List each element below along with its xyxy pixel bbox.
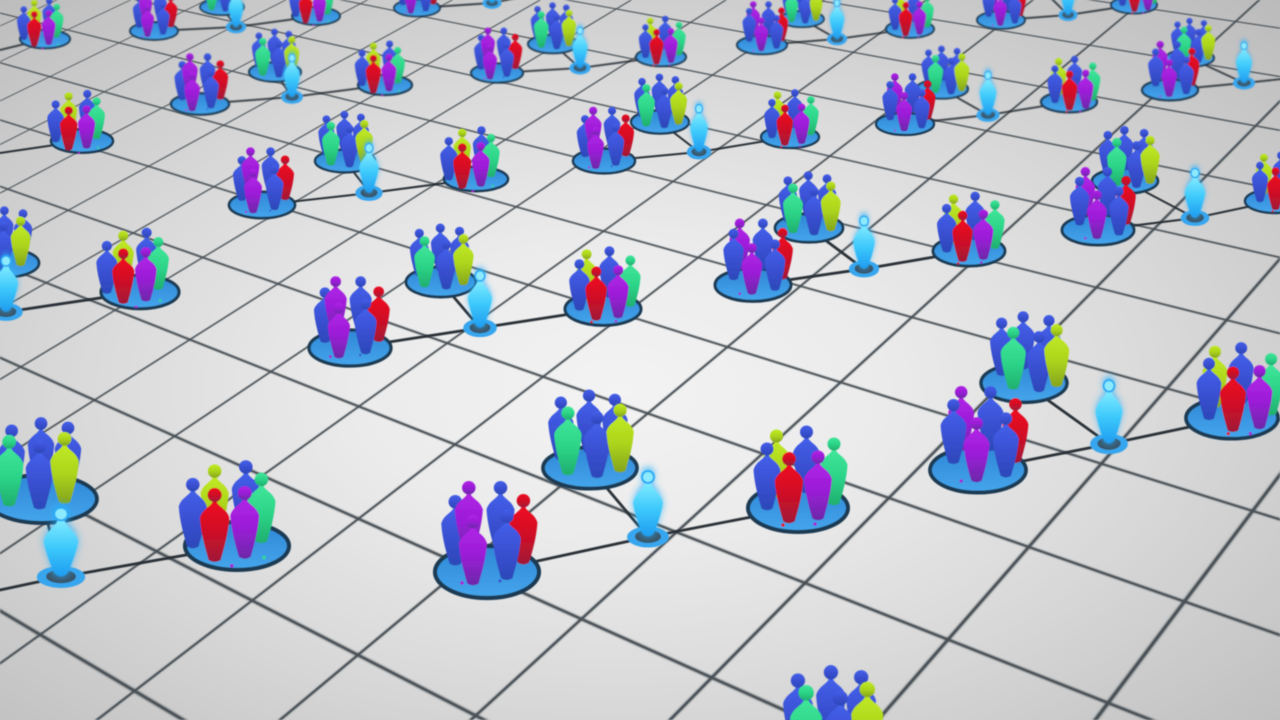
cluster — [47, 90, 113, 154]
cluster — [229, 147, 295, 218]
hub: blue glowing person — [627, 467, 669, 548]
cluster — [780, 0, 824, 27]
cluster — [1166, 18, 1215, 67]
cluster — [528, 2, 578, 53]
cluster — [17, 0, 70, 49]
cluster — [289, 0, 340, 26]
cluster — [775, 171, 843, 242]
cluster — [0, 417, 97, 523]
cluster — [977, 0, 1026, 29]
hub: blue glowing person — [463, 267, 497, 337]
hub: blue glowing person — [483, 0, 501, 9]
hub: blue glowing person — [226, 0, 246, 33]
cluster — [777, 665, 887, 720]
cluster — [249, 29, 301, 82]
cluster — [1062, 167, 1136, 245]
cluster — [886, 0, 934, 38]
hub: blue glowing person — [1090, 376, 1128, 454]
hub: blue glowing person — [281, 51, 303, 104]
cluster — [0, 206, 39, 277]
cluster — [1186, 342, 1280, 439]
hub: blue glowing person — [0, 252, 23, 321]
connection lines: middle hubs — [0, 122, 1275, 230]
cluster — [761, 89, 819, 148]
cluster — [171, 53, 229, 115]
cluster — [315, 111, 375, 172]
cluster — [406, 224, 476, 297]
hub: blue glowing person — [827, 0, 847, 45]
cluster — [573, 107, 635, 173]
hub: blue glowing person — [687, 102, 711, 160]
hub: blue glowing person — [1181, 166, 1209, 226]
hub: blue glowing person — [1233, 40, 1255, 90]
hub: blue glowing person — [1059, 0, 1077, 21]
cluster — [309, 276, 391, 366]
hub: blue glowing person — [849, 213, 879, 277]
hub: blue glowing person — [37, 504, 85, 588]
cluster — [355, 40, 412, 96]
cluster — [200, 0, 244, 15]
cluster — [876, 73, 935, 135]
cluster — [440, 126, 508, 192]
cluster — [1111, 0, 1160, 14]
cluster — [933, 192, 1005, 266]
connection lines: near hubs — [0, 228, 1232, 590]
cluster — [981, 311, 1069, 402]
far network rows — [0, 0, 1280, 124]
hub: blue glowing person — [976, 69, 1000, 122]
cluster — [96, 228, 179, 309]
cluster — [1142, 41, 1199, 100]
cluster — [748, 426, 848, 532]
cluster — [1245, 152, 1280, 213]
cluster — [737, 1, 788, 54]
cluster — [179, 460, 289, 570]
cluster — [435, 481, 539, 598]
cluster — [130, 0, 178, 40]
middle network rows — [0, 73, 1280, 230]
cluster — [1041, 56, 1100, 112]
hub: blue glowing person — [570, 25, 590, 75]
cluster — [565, 246, 641, 325]
cluster — [930, 386, 1028, 493]
cluster — [1092, 126, 1160, 194]
cluster — [916, 46, 969, 99]
cluster — [636, 16, 686, 66]
cluster — [471, 28, 523, 83]
near network rows — [0, 167, 1280, 720]
cluster — [543, 390, 637, 489]
cluster — [394, 0, 440, 17]
cluster — [631, 74, 689, 134]
cluster — [715, 218, 793, 301]
connection lines: far hubs — [0, 0, 1280, 124]
hub: blue glowing person — [355, 140, 383, 201]
